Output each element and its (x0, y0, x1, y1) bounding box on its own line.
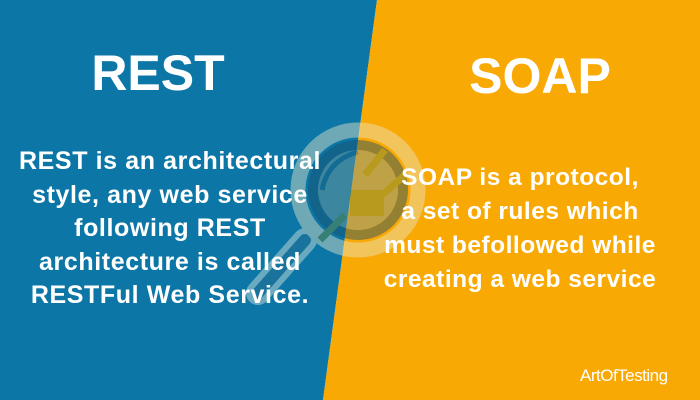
text block: REST description: style, any web service (32, 180, 308, 208)
text block: SOAP description (384, 164, 656, 293)
text block: REST description: RESTFul Web Service. (31, 281, 309, 309)
heading: SOAP: SOAP (469, 48, 611, 104)
icon: magnifier with plug (246, 122, 426, 305)
text block: REST description: architecture is called (39, 248, 301, 276)
text block: SOAP description: a set of rules which (401, 198, 639, 225)
text block: REST description (19, 147, 321, 309)
text block: SOAP description: SOAP is a protocol, (401, 164, 639, 191)
text block: SOAP description: creating a web service (384, 266, 656, 293)
logo: ArtOfTesting: ArtOfTesting (580, 366, 668, 385)
text block: REST description: following REST (74, 214, 266, 242)
text block: REST description: REST is an architectural (19, 147, 321, 175)
text block: SOAP description: must befollowed while (384, 232, 656, 259)
heading: REST: REST (91, 45, 225, 101)
